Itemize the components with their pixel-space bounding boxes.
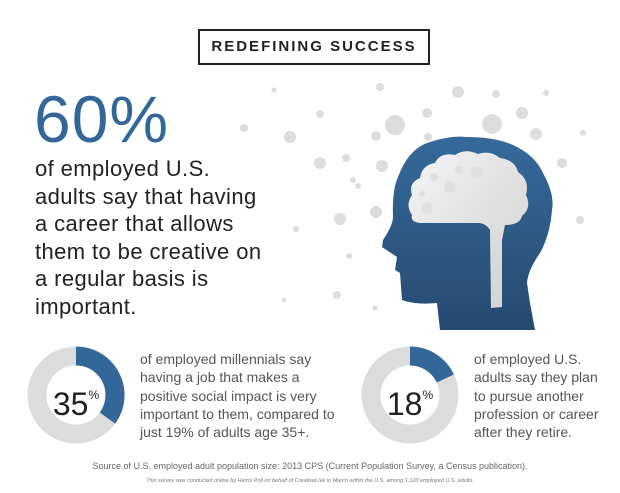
main text block: a career that allows: [35, 211, 234, 236]
main text block: of employed U.S.: [35, 156, 210, 181]
text: millennials: just 19% of adults age 35+.: [140, 424, 309, 440]
text: retire: adults say they plan: [474, 369, 598, 385]
survey footnote: This survey was conducted online by Harris Poll on behalf of CreativeLive in March within the U.S. among 1,120 employed U.S. adults.: [146, 478, 474, 484]
brain: [408, 151, 528, 308]
title: REDEFINING SUCCESS: [211, 38, 417, 55]
text: retire: profession or career: [474, 406, 599, 422]
main text block: adults say that having: [35, 184, 257, 209]
donut chart: 18%: 18%: [387, 386, 433, 422]
source note: Source of U.S. employed adult population size: 2013 CPS (Current Population Survey, a Census publication).: [92, 461, 528, 471]
text: retire: of employed U.S.: [474, 351, 581, 367]
text: millennials: having a job that makes a: [140, 369, 300, 385]
text: millennials: positive social impact is very: [140, 388, 317, 404]
text: retire: after they retire.: [474, 424, 572, 440]
head: [382, 137, 553, 330]
donut chart: 18%: [362, 346, 458, 444]
donut chart: 35%: [28, 346, 124, 444]
main text block: a regular basis is: [35, 266, 208, 291]
big stat 60%: 60%: [34, 82, 169, 156]
main text block: important.: [35, 294, 137, 319]
title: [198, 29, 430, 65]
main text block: them to be creative on: [35, 239, 261, 264]
text: millennials: [140, 351, 335, 440]
text: millennials: of employed millennials say: [140, 351, 311, 367]
text: retire: [474, 351, 599, 440]
text: retire: to pursue another: [474, 388, 584, 404]
dots: [240, 83, 586, 310]
donut chart: 35%: 35%: [53, 386, 99, 422]
main text block: [35, 156, 261, 319]
text: millennials: important to them, compared to: [140, 406, 335, 422]
